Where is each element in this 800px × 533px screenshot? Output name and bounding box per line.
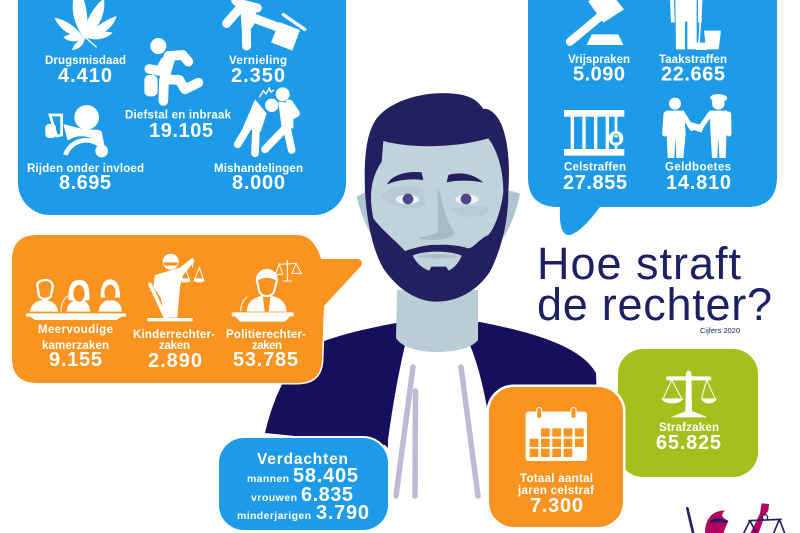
label: meervoudige kamerzaken — [38, 324, 113, 371]
title — [537, 238, 772, 330]
label: meervoudige kamerzaken: Meervoudige — [38, 324, 113, 336]
label: totaal aantal jaren celstraf: jaren celstraf — [517, 485, 594, 497]
row: vrouwen — [251, 484, 353, 506]
judge figure — [265, 93, 597, 533]
logo: cropped justice figures — [687, 503, 785, 533]
icon: three judges — [26, 279, 126, 320]
title: de rechter? — [537, 279, 772, 330]
heading: verdachten: Verdachten — [257, 451, 348, 468]
label: geldboetes — [665, 162, 731, 194]
icon: lady justice — [147, 254, 204, 321]
row: minderjarigen: 3.790 — [316, 502, 369, 524]
label: vrijspraken: 5.090 — [573, 64, 625, 86]
label: celstraffen — [563, 162, 627, 194]
label: vrijspraken — [568, 54, 630, 86]
label: totaal aantal jaren celstraf — [517, 473, 594, 517]
icon: worker with bucket — [670, 0, 721, 50]
label: diefstal: 19.105 — [149, 120, 213, 142]
shirt — [388, 345, 490, 533]
label: meervoudige kamerzaken: kamerzaken — [42, 340, 109, 352]
head — [357, 93, 520, 302]
row: minderjarigen — [237, 502, 369, 524]
label: mishandelingen — [214, 163, 303, 194]
label: celstraffen: 27.855 — [563, 172, 627, 194]
label: celstraffen: Celstraffen — [564, 162, 626, 174]
label: diefstal: Diefstal en inbraak — [125, 110, 232, 122]
panel: rechters speech bubble — [12, 235, 362, 383]
label: kinderrechterzaken: Kinderrechter- — [133, 329, 215, 341]
label: kinderrechterzaken: 2.890 — [148, 350, 202, 372]
label: strafzaken: 65.825 — [656, 432, 721, 454]
label: rijden onder invloed: Rijden onder invloed — [27, 163, 144, 175]
label: rijden onder invloed: 8.695 — [59, 172, 111, 194]
label: vernieling — [229, 55, 287, 87]
row: minderjarigen: minderjarigen — [237, 510, 311, 522]
panel: soorten misdrijven — [18, 0, 346, 215]
source note: Cijfers 2020 — [700, 326, 740, 335]
label: politierechterzaken — [226, 329, 306, 371]
bands — [396, 367, 478, 496]
icon: paying a fine — [665, 94, 729, 158]
row: mannen: mannen — [247, 473, 289, 485]
row: mannen: 58.405 — [293, 465, 358, 487]
icon: cannabis leaf — [54, 0, 117, 50]
panel: verdachten — [219, 438, 388, 530]
label: taakstraffen: 22.665 — [661, 64, 725, 86]
label: kinderrechterzaken — [133, 329, 215, 372]
icon: police judge — [232, 260, 301, 322]
label: geldboetes: Geldboetes — [665, 162, 731, 174]
label: vrijspraken: Vrijspraken — [568, 54, 630, 66]
label: vernieling: 2.350 — [231, 65, 285, 87]
icon: vandal kicking bin — [227, 0, 305, 51]
icon: prison bars — [564, 110, 624, 156]
label: mishandelingen: 8.000 — [232, 172, 285, 194]
robe — [265, 322, 597, 460]
label: meervoudige kamerzaken: 9.155 — [49, 349, 102, 371]
icon: calendar — [526, 408, 587, 461]
label: politierechterzaken: 53.785 — [233, 349, 298, 371]
label: politierechterzaken: zaken — [252, 340, 282, 352]
panel: strafzaken — [618, 349, 758, 477]
icon: running thief — [144, 38, 198, 101]
label: drugsmisdaad: 4.410 — [58, 65, 112, 87]
label: taakstraffen — [659, 54, 727, 86]
row: vrouwen: 6.835 — [301, 484, 353, 506]
panel: totaal aantal jaren celstraf — [489, 387, 623, 527]
label: politierechterzaken: Politierechter- — [226, 329, 306, 341]
label: vernieling: Vernieling — [229, 55, 287, 67]
icon: gavel — [570, 0, 624, 45]
neck — [396, 290, 478, 352]
label: rijden onder invloed — [27, 163, 144, 194]
label: drugsmisdaad — [45, 55, 126, 87]
icon: scales — [661, 371, 717, 417]
title: Hoe straft — [537, 238, 741, 289]
row: mannen — [247, 465, 358, 487]
label: totaal aantal jaren celstraf: Totaal aantal — [520, 473, 593, 485]
label: strafzaken: Strafzaken — [659, 422, 719, 434]
panel: straffen speech bubble — [528, 0, 777, 235]
label: geldboetes: 14.810 — [666, 172, 731, 194]
icon: drunk driver — [45, 105, 108, 157]
icon: assault — [238, 87, 296, 153]
label: mishandelingen: Mishandelingen — [214, 163, 303, 175]
label: kinderrechterzaken: zaken — [159, 340, 190, 352]
label: diefstal — [125, 110, 232, 142]
label: taakstraffen: Taakstraffen — [659, 54, 727, 66]
label: totaal aantal jaren celstraf: 7.300 — [530, 495, 583, 517]
label: drugsmisdaad: Drugsmisdaad — [45, 55, 126, 67]
row: vrouwen: vrouwen — [251, 492, 297, 504]
label: strafzaken — [656, 422, 721, 454]
